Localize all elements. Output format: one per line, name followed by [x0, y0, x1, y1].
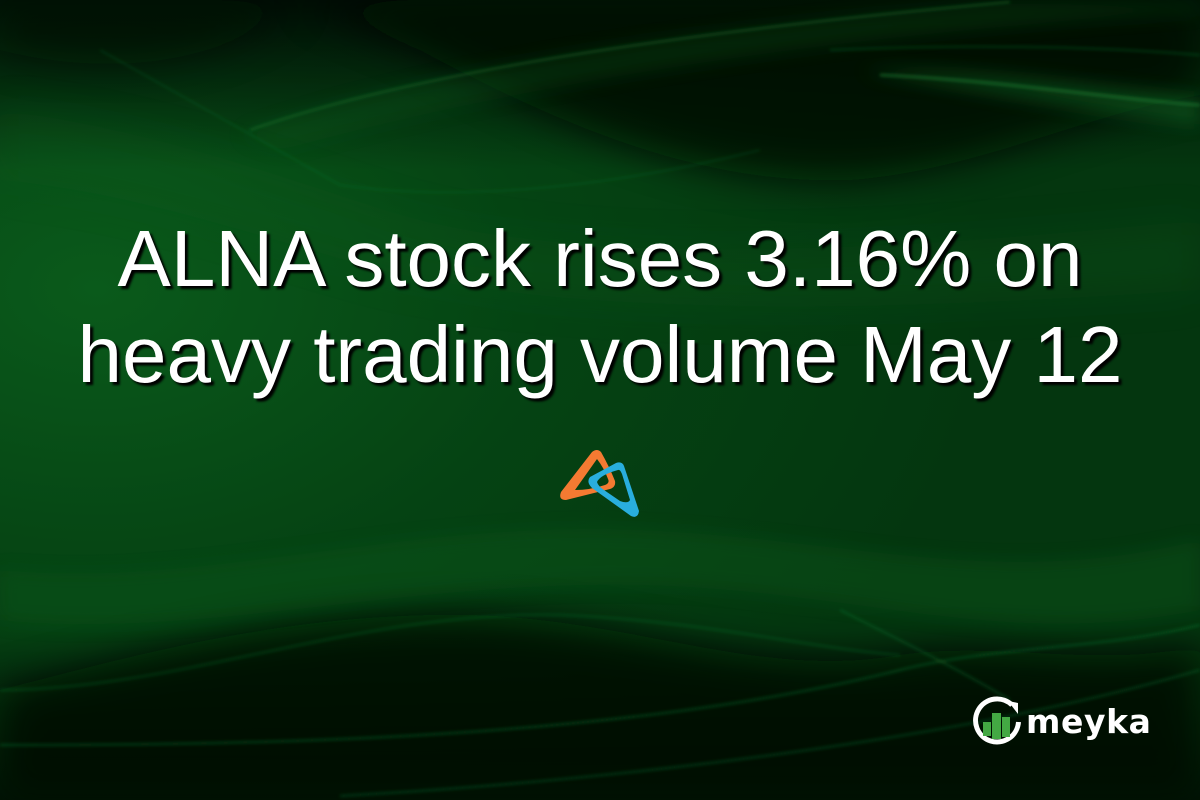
title: heavy trading volume May 12	[78, 310, 1122, 399]
title	[78, 214, 1122, 403]
title: ALNA stock rises 3.16% on	[118, 214, 1082, 303]
brand name: meyka	[1026, 702, 1152, 741]
